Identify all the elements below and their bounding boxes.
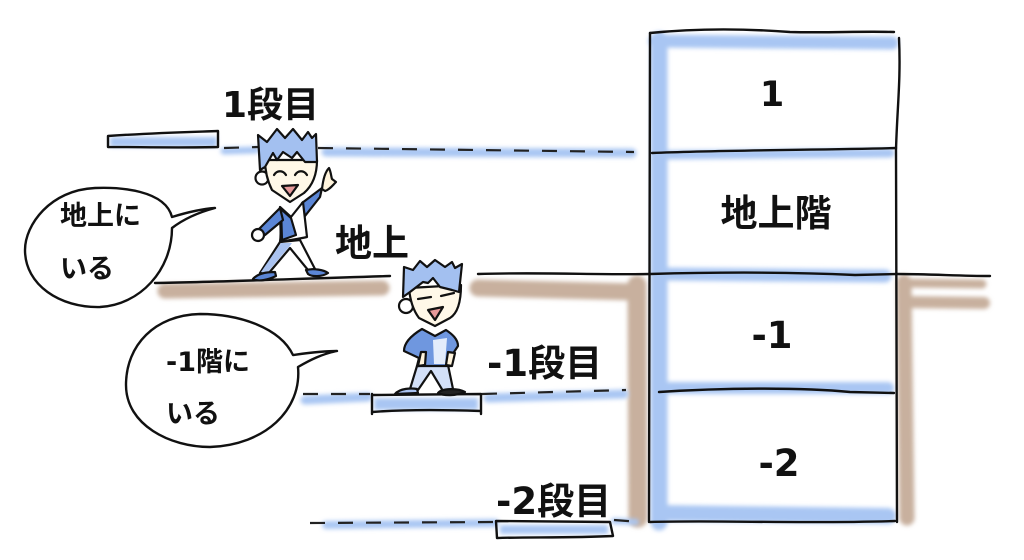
stair line: 1段目 bbox=[224, 147, 634, 153]
ears bbox=[399, 299, 413, 313]
hands bbox=[418, 352, 455, 366]
label: -1段目: -1段目 bbox=[487, 342, 602, 385]
stair line: -1段目 bbox=[303, 390, 626, 400]
face bbox=[409, 285, 461, 326]
torso bbox=[280, 202, 307, 242]
body and akimbo arms bbox=[404, 329, 458, 366]
eyes bbox=[418, 293, 454, 299]
label: -2段目: -2段目 bbox=[496, 480, 611, 523]
floor label: 1: 1 bbox=[760, 75, 784, 115]
character: waving boy on ground bbox=[252, 129, 336, 280]
eyes bbox=[274, 171, 307, 175]
fist bbox=[252, 229, 264, 241]
label: 1段目: 1段目 bbox=[222, 85, 319, 126]
label: 地上: 地上 bbox=[335, 222, 409, 265]
shoes bbox=[253, 269, 328, 280]
ear bbox=[256, 172, 268, 184]
ground shading bbox=[165, 282, 984, 518]
floor label: -2: -2 bbox=[758, 442, 800, 485]
speech bubble: -1階にいる bbox=[126, 314, 337, 447]
floor label: 地上階: 地上階 bbox=[720, 192, 832, 235]
step: -2段目 platform bbox=[496, 521, 613, 538]
face bbox=[265, 160, 317, 202]
legs bbox=[410, 365, 453, 391]
speech bubble: 地上にいる: いる bbox=[60, 254, 114, 285]
speech bubble: 地上にいる bbox=[25, 188, 215, 307]
step: -1段目 platform bbox=[372, 394, 481, 414]
speech bubble: -1階にいる: -1階に bbox=[166, 347, 250, 378]
step: 1段目 platform bbox=[108, 131, 218, 147]
shoes bbox=[395, 389, 418, 394]
stair line: -2段目 bbox=[310, 520, 640, 525]
speech bubble: -1階にいる: いる bbox=[166, 399, 220, 430]
hand bbox=[322, 168, 336, 191]
hair bbox=[258, 129, 317, 170]
building blue shading bbox=[655, 40, 892, 522]
mouth bbox=[428, 307, 443, 320]
legs bbox=[260, 240, 315, 274]
mouth bbox=[282, 185, 298, 196]
raised arm bbox=[302, 188, 322, 216]
left arm bbox=[258, 208, 283, 235]
hair bbox=[403, 260, 462, 297]
building outline with floors bbox=[649, 30, 900, 522]
floor label: -1: -1 bbox=[751, 314, 793, 357]
ground line bbox=[155, 273, 990, 283]
character: boy on -1 step bbox=[395, 260, 465, 395]
speech bubble: 地上にいる: 地上に bbox=[60, 201, 141, 232]
